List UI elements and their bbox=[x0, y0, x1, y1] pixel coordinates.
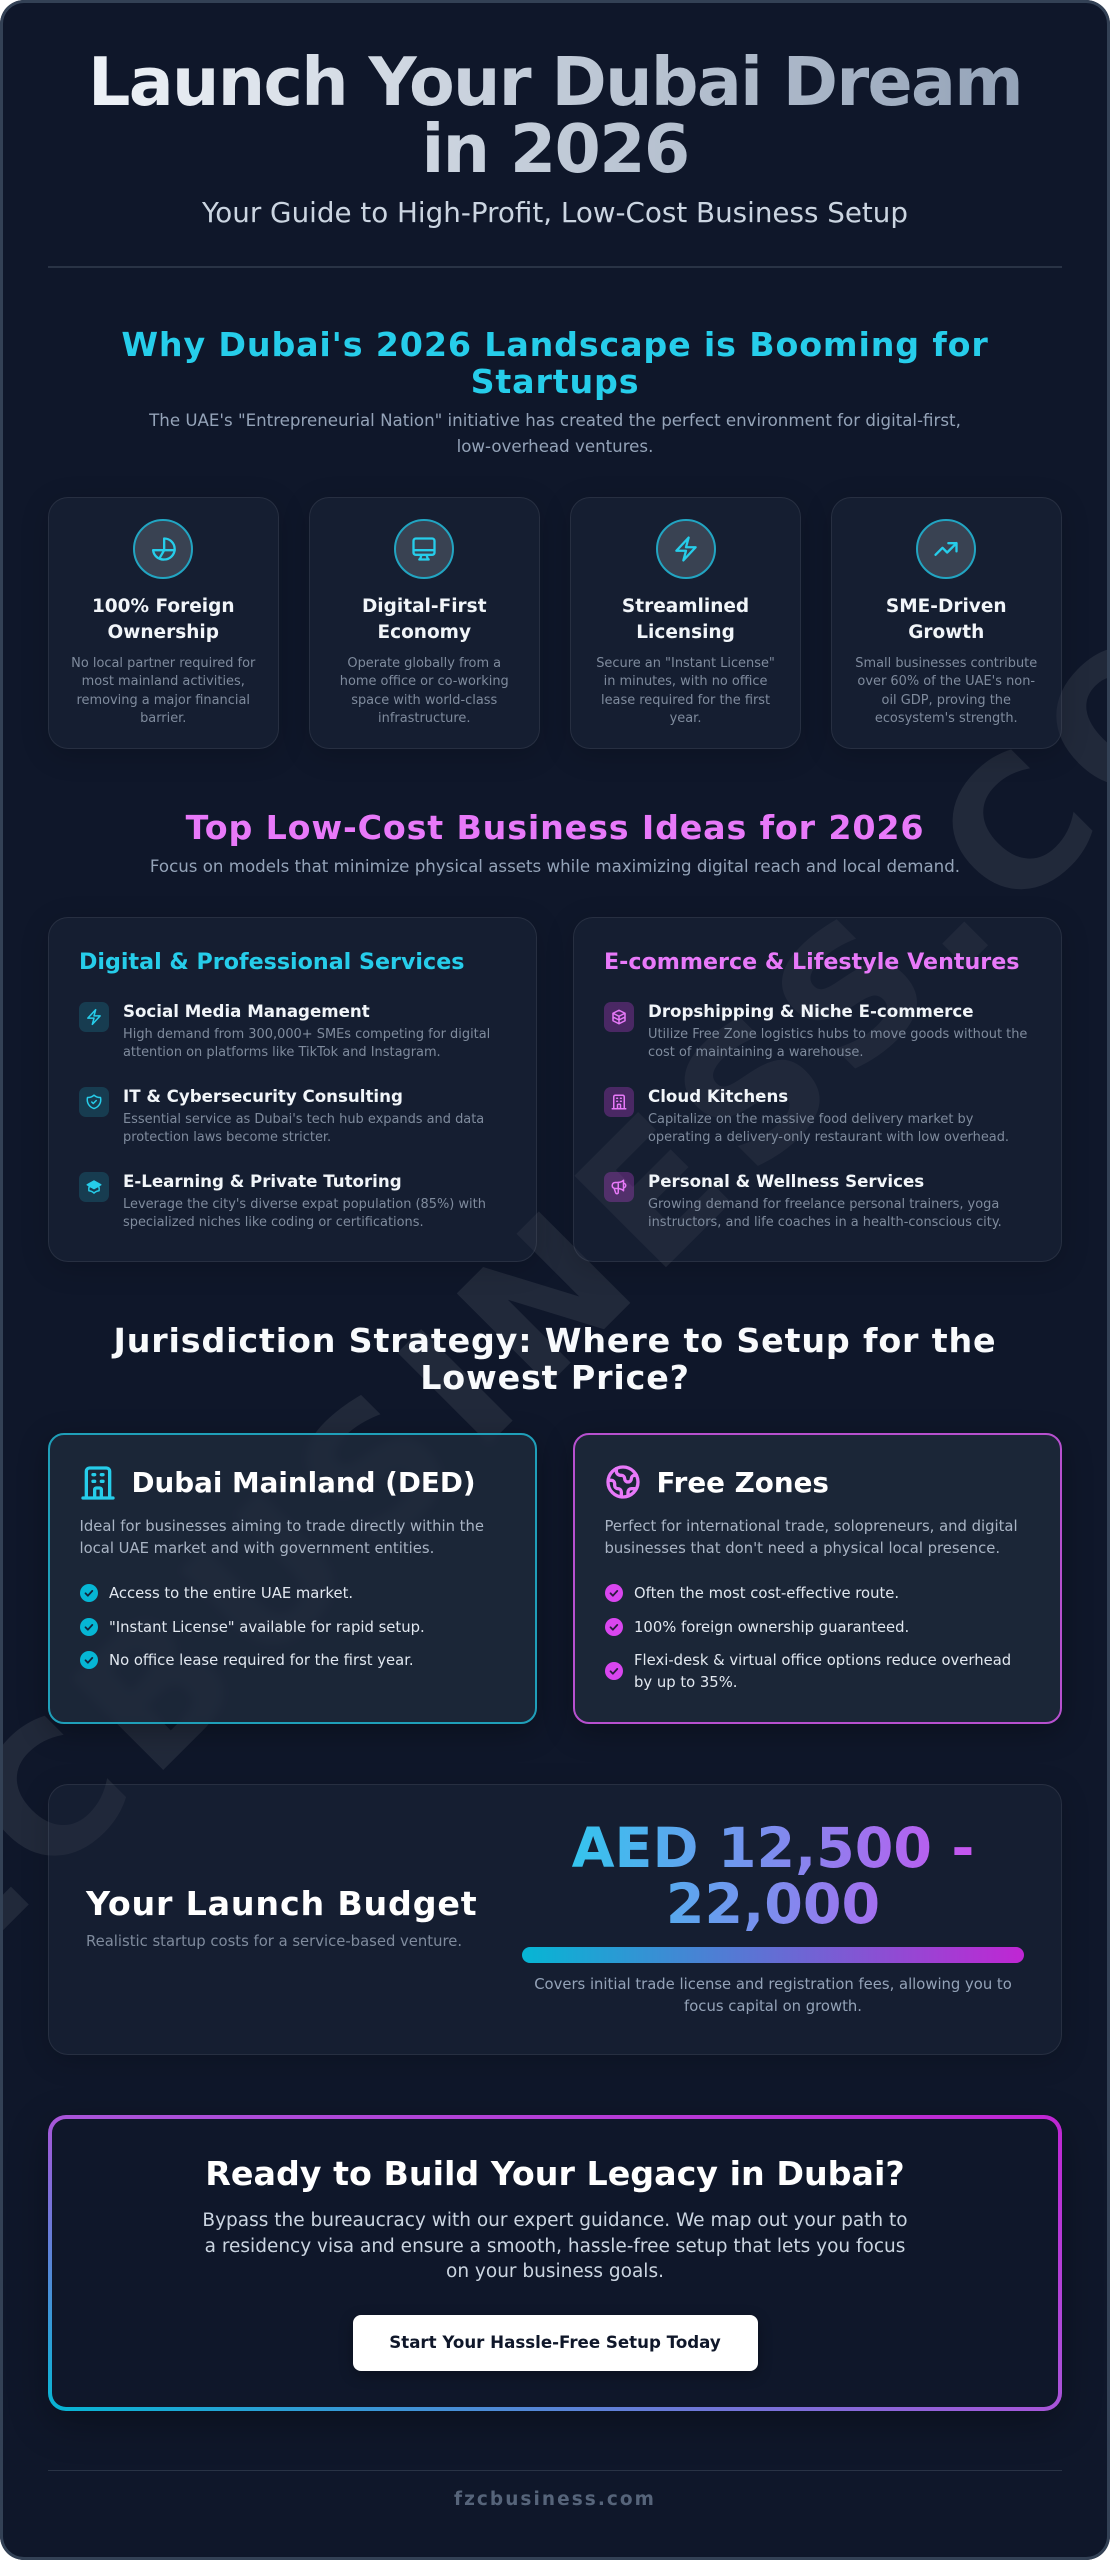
item text: Utilize Free Zone logistics hubs to move goods without the bbox=[648, 1026, 1027, 1042]
title: in 2026 bbox=[421, 110, 689, 188]
card text bbox=[855, 656, 1037, 726]
heading: why Dubai: Startups bbox=[471, 362, 639, 401]
item text bbox=[648, 1112, 1009, 1145]
call to action title: Ready to Build Your Legacy in Dubai? bbox=[205, 2154, 905, 2192]
card text: Ideal for businesses aiming to trade directly within the bbox=[80, 1518, 484, 1535]
card text: Perfect for international trade, solopreneurs, and digital bbox=[604, 1518, 1018, 1535]
card: SME-driven growth bbox=[831, 497, 1062, 749]
footer: website: fzcbusiness.com bbox=[454, 2489, 656, 2510]
card text: removing a major financial bbox=[76, 692, 250, 708]
budget amount: AED 12,500 - bbox=[572, 1816, 974, 1881]
item text: attention on platforms like TikTok and Instagram. bbox=[123, 1045, 441, 1060]
text: why Dubai intro bbox=[149, 410, 961, 456]
item text: Capitalize on the massive food delivery market by bbox=[648, 1112, 973, 1126]
magenta card border bbox=[573, 1433, 1062, 1724]
subtitle: Your Guide to High-Profit, Low-Cost Business Setup bbox=[202, 196, 908, 228]
item text bbox=[648, 1196, 1002, 1230]
check item: by up to 35%. bbox=[634, 1674, 737, 1690]
card text: barrier. bbox=[140, 711, 186, 726]
item text: protection laws become stricter. bbox=[123, 1130, 331, 1145]
check item: 100% foreign ownership guaranteed. bbox=[634, 1618, 909, 1636]
item text: cost of maintaining a warehouse. bbox=[648, 1045, 863, 1060]
item: cloud kitchens bbox=[604, 1086, 1009, 1145]
item: e-learning bbox=[79, 1172, 486, 1230]
check item: Often the most cost-effective route. bbox=[634, 1584, 899, 1602]
item text: operating a delivery-only restaurant with low overhead. bbox=[648, 1130, 1009, 1145]
heading: jurisdiction strategy: Lowest Price? bbox=[420, 1358, 690, 1396]
card title bbox=[622, 596, 749, 643]
item text: Leverage the city's diverse expat population (85%) with bbox=[123, 1196, 486, 1212]
item title: Social Media Management bbox=[123, 1002, 370, 1020]
footer divider bbox=[48, 2470, 1062, 2471]
item: personal and wellness bbox=[604, 1172, 1002, 1230]
title bbox=[48, 48, 1062, 182]
card title: Dubai Mainland (DED) bbox=[132, 1466, 476, 1498]
item text bbox=[648, 1026, 1027, 1060]
item text bbox=[123, 1112, 484, 1145]
check item bbox=[605, 1652, 1011, 1690]
card title bbox=[886, 596, 1007, 643]
panel: digital and professional services bbox=[48, 917, 537, 1262]
budget amount: 22,000 bbox=[666, 1872, 880, 1936]
text: top ideas intro: Focus on models that minimize physical assets while maximizing digital reach and local demand. bbox=[150, 856, 960, 876]
panel heading: E-commerce & Lifestyle Ventures bbox=[604, 949, 1019, 975]
budget subtitle: Realistic startup costs for a service-based venture. bbox=[86, 1932, 462, 1950]
item title: Cloud Kitchens bbox=[648, 1086, 788, 1106]
panel: launch budget bbox=[48, 1784, 1062, 2055]
item text bbox=[123, 1026, 490, 1060]
card title: Licensing bbox=[636, 622, 735, 643]
header divider bbox=[48, 266, 1062, 268]
call to action text: Bypass the bureaucracy with our expert guidance. We map out your path to bbox=[202, 2210, 908, 2231]
card text: local UAE market and with government entities. bbox=[80, 1540, 434, 1557]
item text: Essential service as Dubai's tech hub expands and data bbox=[123, 1112, 484, 1126]
item title: IT & Cybersecurity Consulting bbox=[123, 1086, 403, 1106]
card text: Operate globally from a bbox=[347, 656, 501, 670]
card text: ecosystem's strength. bbox=[875, 711, 1018, 726]
card text: Secure an "Instant License" bbox=[596, 656, 775, 670]
call to action text: a residency visa and ensure a smooth, hassle-free setup that lets you focus bbox=[205, 2236, 905, 2257]
card title: Digital-First bbox=[362, 596, 487, 617]
card title: Economy bbox=[377, 622, 471, 643]
panel: Dubai mainland bbox=[48, 1433, 537, 1724]
card title: Free Zones bbox=[656, 1466, 829, 1498]
card title: Streamlined bbox=[622, 596, 749, 617]
icon: speakerphone bbox=[604, 1172, 634, 1202]
card text: most mainland activities, bbox=[82, 674, 245, 689]
card text: Small businesses contribute bbox=[855, 656, 1037, 670]
card text: No local partner required for bbox=[71, 656, 255, 670]
card text: businesses that don't need a physical local presence. bbox=[604, 1540, 1000, 1557]
card text bbox=[596, 656, 775, 726]
panel: call to action bbox=[48, 2115, 1062, 2411]
budget title: Your Launch Budget bbox=[86, 1884, 477, 1923]
card title bbox=[92, 596, 235, 643]
card text bbox=[71, 656, 256, 726]
heading: why Dubai: Why Dubai's 2026 Landscape is Booming for bbox=[121, 325, 989, 364]
budget note: focus capital on growth. bbox=[684, 1998, 862, 2014]
card: digital-first economy bbox=[309, 497, 540, 749]
icon: building bbox=[604, 1087, 634, 1117]
item: social media management bbox=[79, 1002, 490, 1060]
card: streamlined licensing bbox=[570, 497, 801, 749]
heading: top ideas: Top Low-Cost Business Ideas for 2026 bbox=[186, 808, 924, 847]
card text bbox=[340, 656, 509, 726]
item: dropshipping bbox=[604, 1002, 1027, 1060]
text: why Dubai intro: The UAE's "Entrepreneurial Nation" initiative has created the perfect environment for digital-first, bbox=[149, 410, 961, 430]
card text: over 60% of the UAE's non- bbox=[857, 674, 1035, 689]
call to action text bbox=[202, 2210, 908, 2282]
icon: building bbox=[81, 1466, 115, 1500]
card title bbox=[362, 596, 487, 643]
card: 100% foreign ownership bbox=[48, 497, 278, 749]
card title: Ownership bbox=[108, 622, 219, 643]
title: Launch Your Dubai Dream bbox=[88, 42, 1022, 120]
icon: globe bbox=[606, 1465, 640, 1499]
heading: why Dubai bbox=[121, 325, 989, 401]
card title: 100% Foreign bbox=[92, 596, 235, 617]
check item: Access to the entire UAE market. bbox=[109, 1584, 353, 1602]
item title: Personal & Wellness Services bbox=[648, 1172, 924, 1190]
button: Start Your Hassle-Free Setup Today bbox=[389, 2333, 721, 2352]
card text: in minutes, with no office bbox=[604, 674, 767, 689]
call to action text: on your business goals. bbox=[446, 2261, 664, 2282]
item title: E-Learning & Private Tutoring bbox=[123, 1172, 402, 1190]
check item: Flexi-desk & virtual office options reduce overhead bbox=[634, 1652, 1011, 1668]
panel: free zones bbox=[573, 1433, 1062, 1724]
panel: e-commerce and lifestyle ventures bbox=[573, 917, 1062, 1262]
icon: trending up bbox=[916, 519, 976, 579]
item text: Growing demand for freelance personal trainers, yoga bbox=[648, 1196, 999, 1212]
card text bbox=[604, 1518, 1018, 1557]
item text: instructors, and life coaches in a health-conscious city. bbox=[648, 1215, 1002, 1230]
panel heading: Digital & Professional Services bbox=[79, 949, 464, 975]
card text: infrastructure. bbox=[378, 711, 470, 726]
icon: cube bbox=[604, 1002, 634, 1032]
card text: home office or co-working bbox=[340, 674, 509, 689]
card text: space with world-class bbox=[351, 692, 497, 708]
icon: academic cap bbox=[78, 1172, 108, 1202]
item text: specialized niches like coding or certifications. bbox=[123, 1215, 424, 1230]
card text bbox=[80, 1518, 484, 1557]
icon: bolt bbox=[78, 1002, 108, 1032]
check item: "Instant License" available for rapid setup. bbox=[109, 1618, 425, 1636]
card text: year. bbox=[670, 711, 701, 726]
icon: desktop computer bbox=[394, 519, 454, 579]
item title: Dropshipping & Niche E-commerce bbox=[648, 1002, 974, 1020]
cyan card border bbox=[48, 1433, 537, 1724]
card title: Growth bbox=[908, 622, 984, 643]
heading: jurisdiction strategy bbox=[112, 1320, 996, 1396]
item text bbox=[123, 1196, 486, 1230]
icon: shield check bbox=[78, 1087, 108, 1117]
budget gradient bar bbox=[522, 1947, 1024, 1963]
button bbox=[352, 2315, 758, 2371]
item: IT and cybersecurity bbox=[79, 1086, 484, 1145]
card text: lease required for the first bbox=[601, 692, 770, 708]
budget note bbox=[534, 1976, 1012, 2014]
budget note: Covers initial trade license and registration fees, allowing you to bbox=[534, 1976, 1012, 1992]
check item: No office lease required for the first year. bbox=[109, 1652, 414, 1668]
card text: oil GDP, proving the bbox=[882, 692, 1011, 708]
card title: SME-Driven bbox=[886, 596, 1007, 617]
heading: jurisdiction strategy: Jurisdiction Strategy: Where to Setup for the bbox=[114, 1320, 996, 1360]
text: why Dubai intro: low-overhead ventures. bbox=[457, 436, 653, 456]
icon: pie chart bbox=[133, 519, 193, 579]
icon: lightning bolt bbox=[656, 519, 716, 579]
item text: High demand from 300,000+ SMEs competing for digital bbox=[123, 1026, 490, 1042]
budget amount bbox=[522, 1821, 1024, 1932]
call to action inner background bbox=[52, 2119, 1058, 2407]
